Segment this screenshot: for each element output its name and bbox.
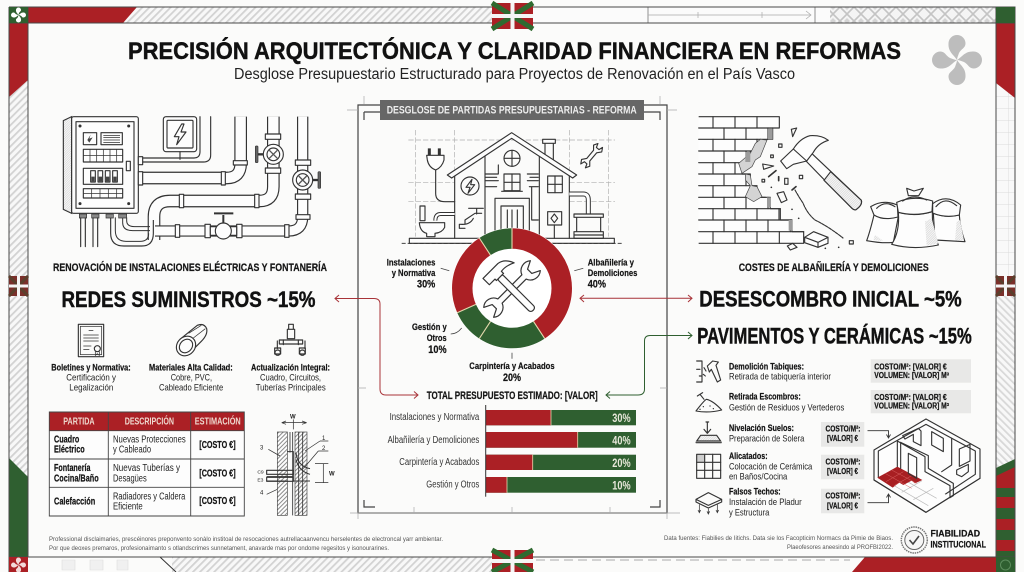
text: materiales alta calidad: Materiales Alta Calidad: [149,362,233,373]
cost box: escombros: COSTO/M²: [VALOR] € [874,393,947,402]
heading: total presupuesto: TOTAL PRESUPUESTO ESTIMADO: [VALOR] [427,390,598,402]
table: partidas: Eléctrico [54,445,85,456]
table: partidas: ESTIMACIÓN [195,414,241,427]
illustration: house with installations [402,130,623,243]
donut label: instalaciones: 30% [417,279,435,291]
badge: fiabilidad institucional [901,527,986,553]
disclaimer text: Professional disclaimaries, prescéinores preponvento sonàlo institoal de resocaciones autrellacaanvencu herselentes de electroncal yarr ambientar. [49,536,443,543]
bar: albañilería: 40% [612,436,631,448]
table: partidas: Cuadro [54,435,79,446]
disclaimer text: Por que deoxes premaros, profesionaimanto s otlandscrimes sunnetament, anavarde mas por ondome regesitos y isonourarines. [49,545,389,552]
corner: bottom right [996,557,1015,572]
text: boletines y normativa [51,362,131,393]
item: alicatados: Colocación de Cerámica [729,461,813,472]
item: retirada escombros: Gestión de Residuos y Vertederos [729,402,844,413]
flag: bottom [492,550,533,572]
subtitle: Desglose Presupuestario Estructurado para Proyectos de Renovación en el País Vasco [234,66,795,83]
item: demolición tabiques: Retirada de tabiquería interior [729,371,831,382]
cost box: falsos techos: [VALOR] € [827,501,859,510]
pipe collars [175,134,311,237]
flag: left [9,276,28,296]
table: partidas: Eficiente [113,501,143,512]
text: materiales alta calidad [149,362,233,393]
illustration: isometric room [874,419,980,512]
table: partidas: Nuevas Tuberías y [113,463,180,474]
cost box: escombros [871,390,971,413]
cost box: demolición: COSTO/M²: [VALOR] € [874,362,947,372]
item: demolición tabiques [697,361,831,382]
item: retirada escombros: Retirada Escombros: [729,391,801,402]
text: actualización integral: Actualización Integral: [251,362,330,373]
table: partidas: Radiadores y Caldera [113,491,186,502]
cost box: nivelación: [VALOR] € [827,434,859,443]
table: partidas: Nuevas Protecciones [113,435,186,446]
bar: carpintería: 20% [612,458,631,470]
donut label: instalaciones [387,258,449,291]
donut label: instalaciones: y Normativa [392,268,436,279]
table: partidas [49,412,244,516]
bar: instalaciones: 30% [612,413,631,425]
cost box: demolición: VOLUMEN: [VALOR] M³ [874,371,949,380]
illustration: electrical panel and plumbing pipes [63,117,321,247]
bar: gestión: 10% [612,480,631,492]
diagram: wall section: 3 [260,445,264,451]
chart: donut budget [452,228,572,349]
text: boletines y normativa: Legalización [69,382,113,393]
item: falsos techos [696,486,802,518]
cost box: falsos techos: COSTO/M²: [826,492,860,501]
item: falsos techos: y Estructura [729,507,770,518]
item: demolición tabiques: Demolición Tabiques: [729,361,804,372]
donut label: gestión: Gestión y [412,322,447,333]
text: actualización integral: Tuberías Principales [256,382,326,393]
icon: hammer and wrench [482,255,547,319]
corner: lauburu bottom left [9,557,28,572]
cost box: nivelación [821,422,864,447]
item: falsos techos: Instalación de Pladur [729,497,802,508]
cost box: escombros: VOLUMEN: [VALOR] M³ [874,402,949,411]
table: partidas: [COSTO €] [199,440,236,451]
corner: top right [996,7,1015,23]
bar: carpintería [399,455,636,470]
bar: gestión [426,477,636,493]
bar: gestión: Gestión y Otros [426,480,479,490]
text: actualización integral [251,362,330,393]
corner: lauburu top left [9,7,28,23]
table: partidas: [COSTO €] [199,469,236,480]
diagram: wall section: 1 [322,436,326,442]
cost box: alicatados [821,455,864,479]
lightning box [163,117,197,152]
item: alicatados: en Baños/Cocina [729,472,788,483]
diagram: wall section: C9 [257,469,264,475]
arrow: desescombro to donut [580,295,692,302]
text: boletines y normativa: Boletines y Normativa: [51,362,131,373]
item: nivelación suelos: Preparación de Solera [729,433,805,444]
table: partidas: Cocina/Baño [54,473,99,484]
heading: left illustration caption: RENOVACIÓN DE INSTALACIONES ELÉCTRICAS Y FONTANERÍA [53,261,327,274]
valves [263,144,283,164]
electrical box [63,117,72,213]
text: actualización integral: Cuadro, Circuitos, [260,372,321,383]
flag: right [996,276,1015,296]
rubble pile [795,190,843,238]
badge: fiabilidad institucional: FIABILIDAD [930,529,980,540]
table: partidas: [COSTO €] [199,496,236,507]
donut label: carpintería: Carpintería y Acabados [469,361,555,372]
arrow: cost box to room bottom [868,494,890,503]
donut label: carpintería [469,353,555,384]
bar: carpintería: Carpintería y Acabados [399,457,479,468]
icon: lauburu [932,35,982,85]
diagram: wall section: W [329,471,335,477]
illustration: brick wall being demolished [699,117,853,250]
donut label: albañilería: 40% [588,279,606,291]
item: nivelación suelos [696,422,805,444]
central panel frame [347,96,680,519]
cost box: demolición [871,359,971,383]
arrow: pavimentos to total [606,332,692,398]
table: partidas: DESCRIPCIÓN [125,414,174,427]
bar: albañilería [388,432,636,448]
donut label: carpintería: 20% [503,372,521,384]
bar: instalaciones: Instalaciones y Normativa [390,412,480,423]
donut label: albañilería [574,258,637,291]
icon: pipe connector [275,324,305,355]
text: materiales alta calidad: Cobre, PVC, [171,372,212,383]
donut label: albañilería: Albañilería y [588,258,635,269]
heading: redes suministros: REDES SUMINISTROS ~15% [62,287,316,312]
title: PRECISIÓN ARQUITECTÓNICA Y CLARIDAD FINANCIERA EN REFORMAS [128,37,901,65]
icon: certificate [78,324,104,357]
item: alicatados: Alicatados: [729,451,768,462]
cost box: alicatados: [VALOR] € [827,467,859,476]
source note: Plaeofesores aneesindo al PROFBI2022. [787,544,893,551]
donut label: gestión: Otros [427,333,447,344]
arrow: cost box to room top [868,431,890,438]
bar: albañilería: Albañilería y Demoliciones [388,435,479,446]
table: partidas: Fontanería [54,463,91,474]
donut label: gestión [412,322,462,356]
donut label: albañilería: Demoliciones [588,268,637,279]
icon: pipe [172,325,207,360]
diagram: wall section: E3 [257,477,264,483]
diagram: wall section: W [290,415,296,421]
item: falsos techos: Falsos Techos: [729,486,781,497]
badge: fiabilidad institucional: INSTITUCIONAL [930,540,986,551]
source note: Data fuentes: Fiabilies de Iitichs. Data sie los Facopticim Normacs da Pimie de Biaos. [664,535,893,542]
diagram: wall section: 4 [260,491,264,497]
table: partidas: y Cableado [113,445,151,456]
diagram: wall section [257,415,335,515]
table: partidas: PARTIDA [63,416,95,427]
text: boletines y normativa: Certificación y [66,372,116,383]
disclaimer text [49,536,443,552]
source note [664,535,893,551]
text: materiales alta calidad: Cableado Eficiente [159,382,223,393]
table: partidas: Desagües [113,473,147,484]
heading: desescombro: DESESCOMBRO INICIAL ~5% [699,286,962,312]
chart: horizontal bars [388,405,636,497]
item: retirada escombros [696,391,844,413]
item: nivelación suelos: Nivelación Suelos: [729,423,794,434]
bar: instalaciones [390,410,636,425]
arrow: redes to total [335,295,418,398]
diagram: wall section: 2 [322,446,326,452]
panel heading bar [380,100,644,120]
cost box: falsos techos [821,489,864,513]
cost box: alicatados: COSTO/M²: [826,457,860,466]
cost box: nivelación: COSTO/M²: [826,425,860,434]
panel heading bar: DESGLOSE DE PARTIDAS PRESUPUESTARIAS - REFORMA [387,104,637,116]
flag: top [492,3,533,29]
donut label: instalaciones: Instalaciones [387,258,435,269]
heading: right illustration caption: COSTES DE ALBAÑILERÍA Y DEMOLICIONES [739,261,929,274]
item: alicatados [697,451,813,483]
illustration: hammer and sacks [781,136,965,248]
table: partidas: Calefacción [54,496,95,507]
donut label: gestión: 10% [428,344,447,356]
cable glands [79,214,127,218]
